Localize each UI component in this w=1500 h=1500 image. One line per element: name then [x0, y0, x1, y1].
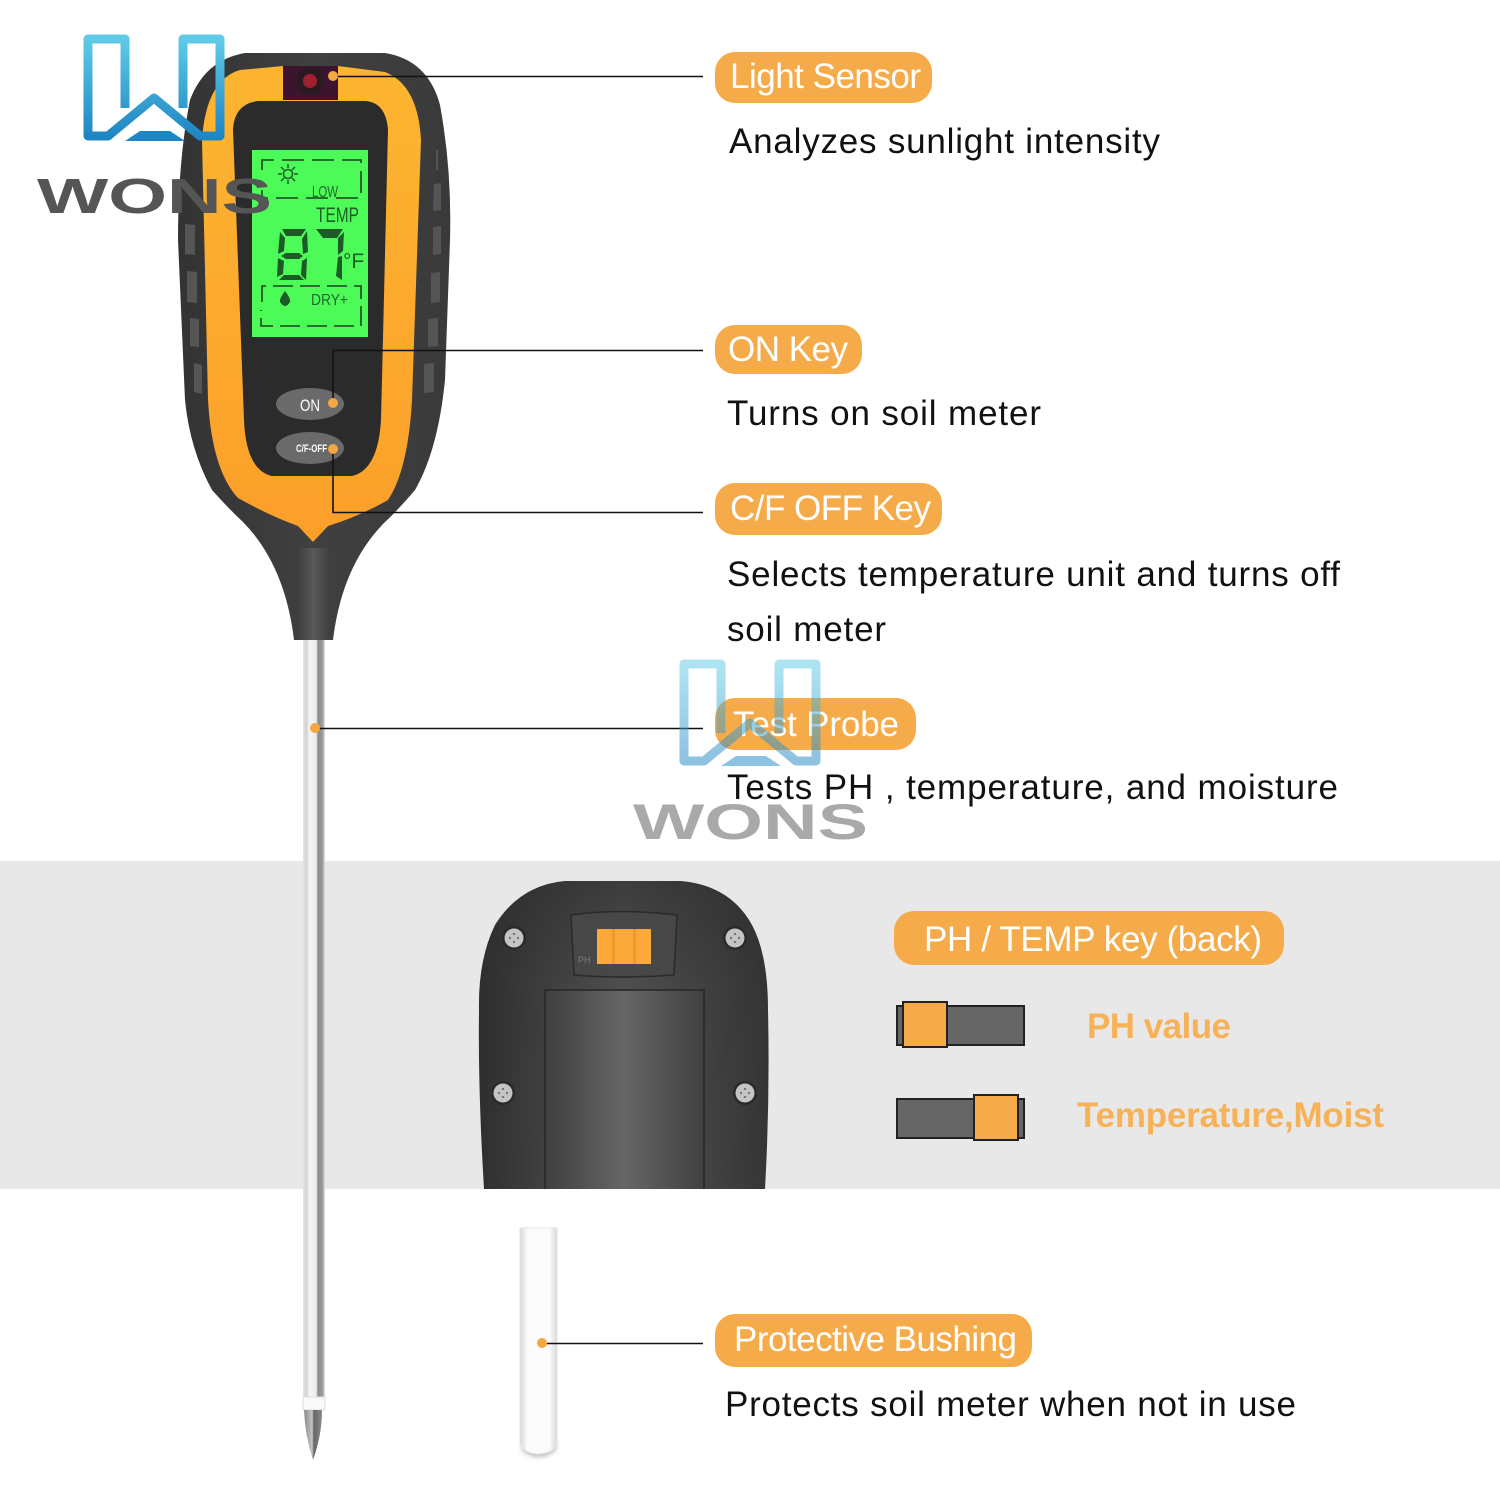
- DRY+ label: DRY+: [311, 292, 348, 309]
- leader: protective bushing: [537, 1338, 703, 1348]
- description: C/F OFF key: soil meter: [727, 610, 886, 649]
- digit 8: [277, 229, 308, 280]
- leader: test probe: [310, 723, 703, 733]
- leader: ON key: [328, 350, 703, 408]
- meter neck: [297, 548, 330, 640]
- text: PH value: PH value: [1087, 1007, 1231, 1046]
- watermark: WONS centre: WONS: [633, 794, 868, 850]
- sun icon: [278, 164, 298, 184]
- label: Protective Bushing: Protective Bushing: [734, 1320, 1017, 1359]
- text: Temperature, Moist: Temperature,Moist: [1077, 1096, 1384, 1135]
- digit 7: [316, 229, 344, 280]
- label: Test Probe: Test Probe: [733, 705, 899, 744]
- LCD screen: [252, 150, 368, 337]
- switch recess: [571, 912, 677, 977]
- soil meter front: [178, 53, 450, 1460]
- grey band: back of meter section: [0, 861, 1500, 1189]
- watermark: WONS top: [37, 39, 272, 224]
- protective bushing tube: [520, 1228, 557, 1457]
- C/F-OFF button: [276, 432, 344, 464]
- description: light sensor: Analyzes sunlight intensity: [729, 122, 1160, 161]
- label: Protective Bushing: [715, 1314, 1032, 1367]
- description: ON key: Turns on soil meter: [727, 394, 1041, 433]
- label: Test Probe: [715, 698, 916, 750]
- degree F: °F: [343, 250, 364, 273]
- battery cover: [545, 990, 704, 1189]
- description: test probe: Tests PH , temperature, and moisture: [727, 768, 1338, 807]
- switch diagram: temperature position: [897, 1095, 1024, 1140]
- label: Light Sensor: Light Sensor: [730, 57, 921, 96]
- label: C/F OFF Key: [715, 483, 942, 535]
- ON button: [276, 388, 344, 420]
- leader: C/F OFF key: [328, 444, 703, 512]
- description: C/F OFF key: [727, 555, 1340, 649]
- PH mark: PH: [578, 955, 591, 965]
- LCD lower dashed box: [261, 286, 361, 326]
- drop icon: [280, 291, 290, 306]
- slide switch: [597, 929, 651, 964]
- orange bezel: [202, 66, 421, 542]
- label: PH / TEMP key: [894, 911, 1284, 965]
- meter housing: [178, 53, 450, 640]
- ON button: ON: [300, 396, 320, 415]
- switch diagram: PH position: [897, 1002, 1024, 1047]
- label: ON Key: [715, 325, 862, 374]
- light sensor window: [283, 66, 338, 100]
- screws: [491, 926, 757, 1105]
- side grips: [185, 150, 441, 394]
- description: C/F OFF key: Selects temperature unit and turns off: [727, 555, 1340, 594]
- display surround: [233, 101, 388, 476]
- description: protective bushing: Protects soil meter when not in use: [725, 1385, 1296, 1424]
- watermark: WONS top: WONS: [37, 170, 272, 224]
- TEMP label: TEMP: [316, 204, 359, 227]
- back of meter: [479, 881, 769, 1189]
- leader: light sensor: [328, 71, 703, 81]
- test probe shaft: [303, 636, 325, 1460]
- LOW label: LOW: [312, 184, 339, 201]
- label: PH / TEMP key: PH / TEMP key (back): [924, 920, 1262, 959]
- label: C/F OFF Key: C/F OFF Key: [730, 489, 932, 528]
- watermark: WONS centre: [633, 664, 868, 850]
- C/F-OFF button: C/F-OFF: [296, 443, 327, 455]
- label: ON Key: ON Key: [728, 330, 848, 369]
- LCD upper dashed box: [262, 160, 361, 198]
- label: Light Sensor: [715, 52, 932, 103]
